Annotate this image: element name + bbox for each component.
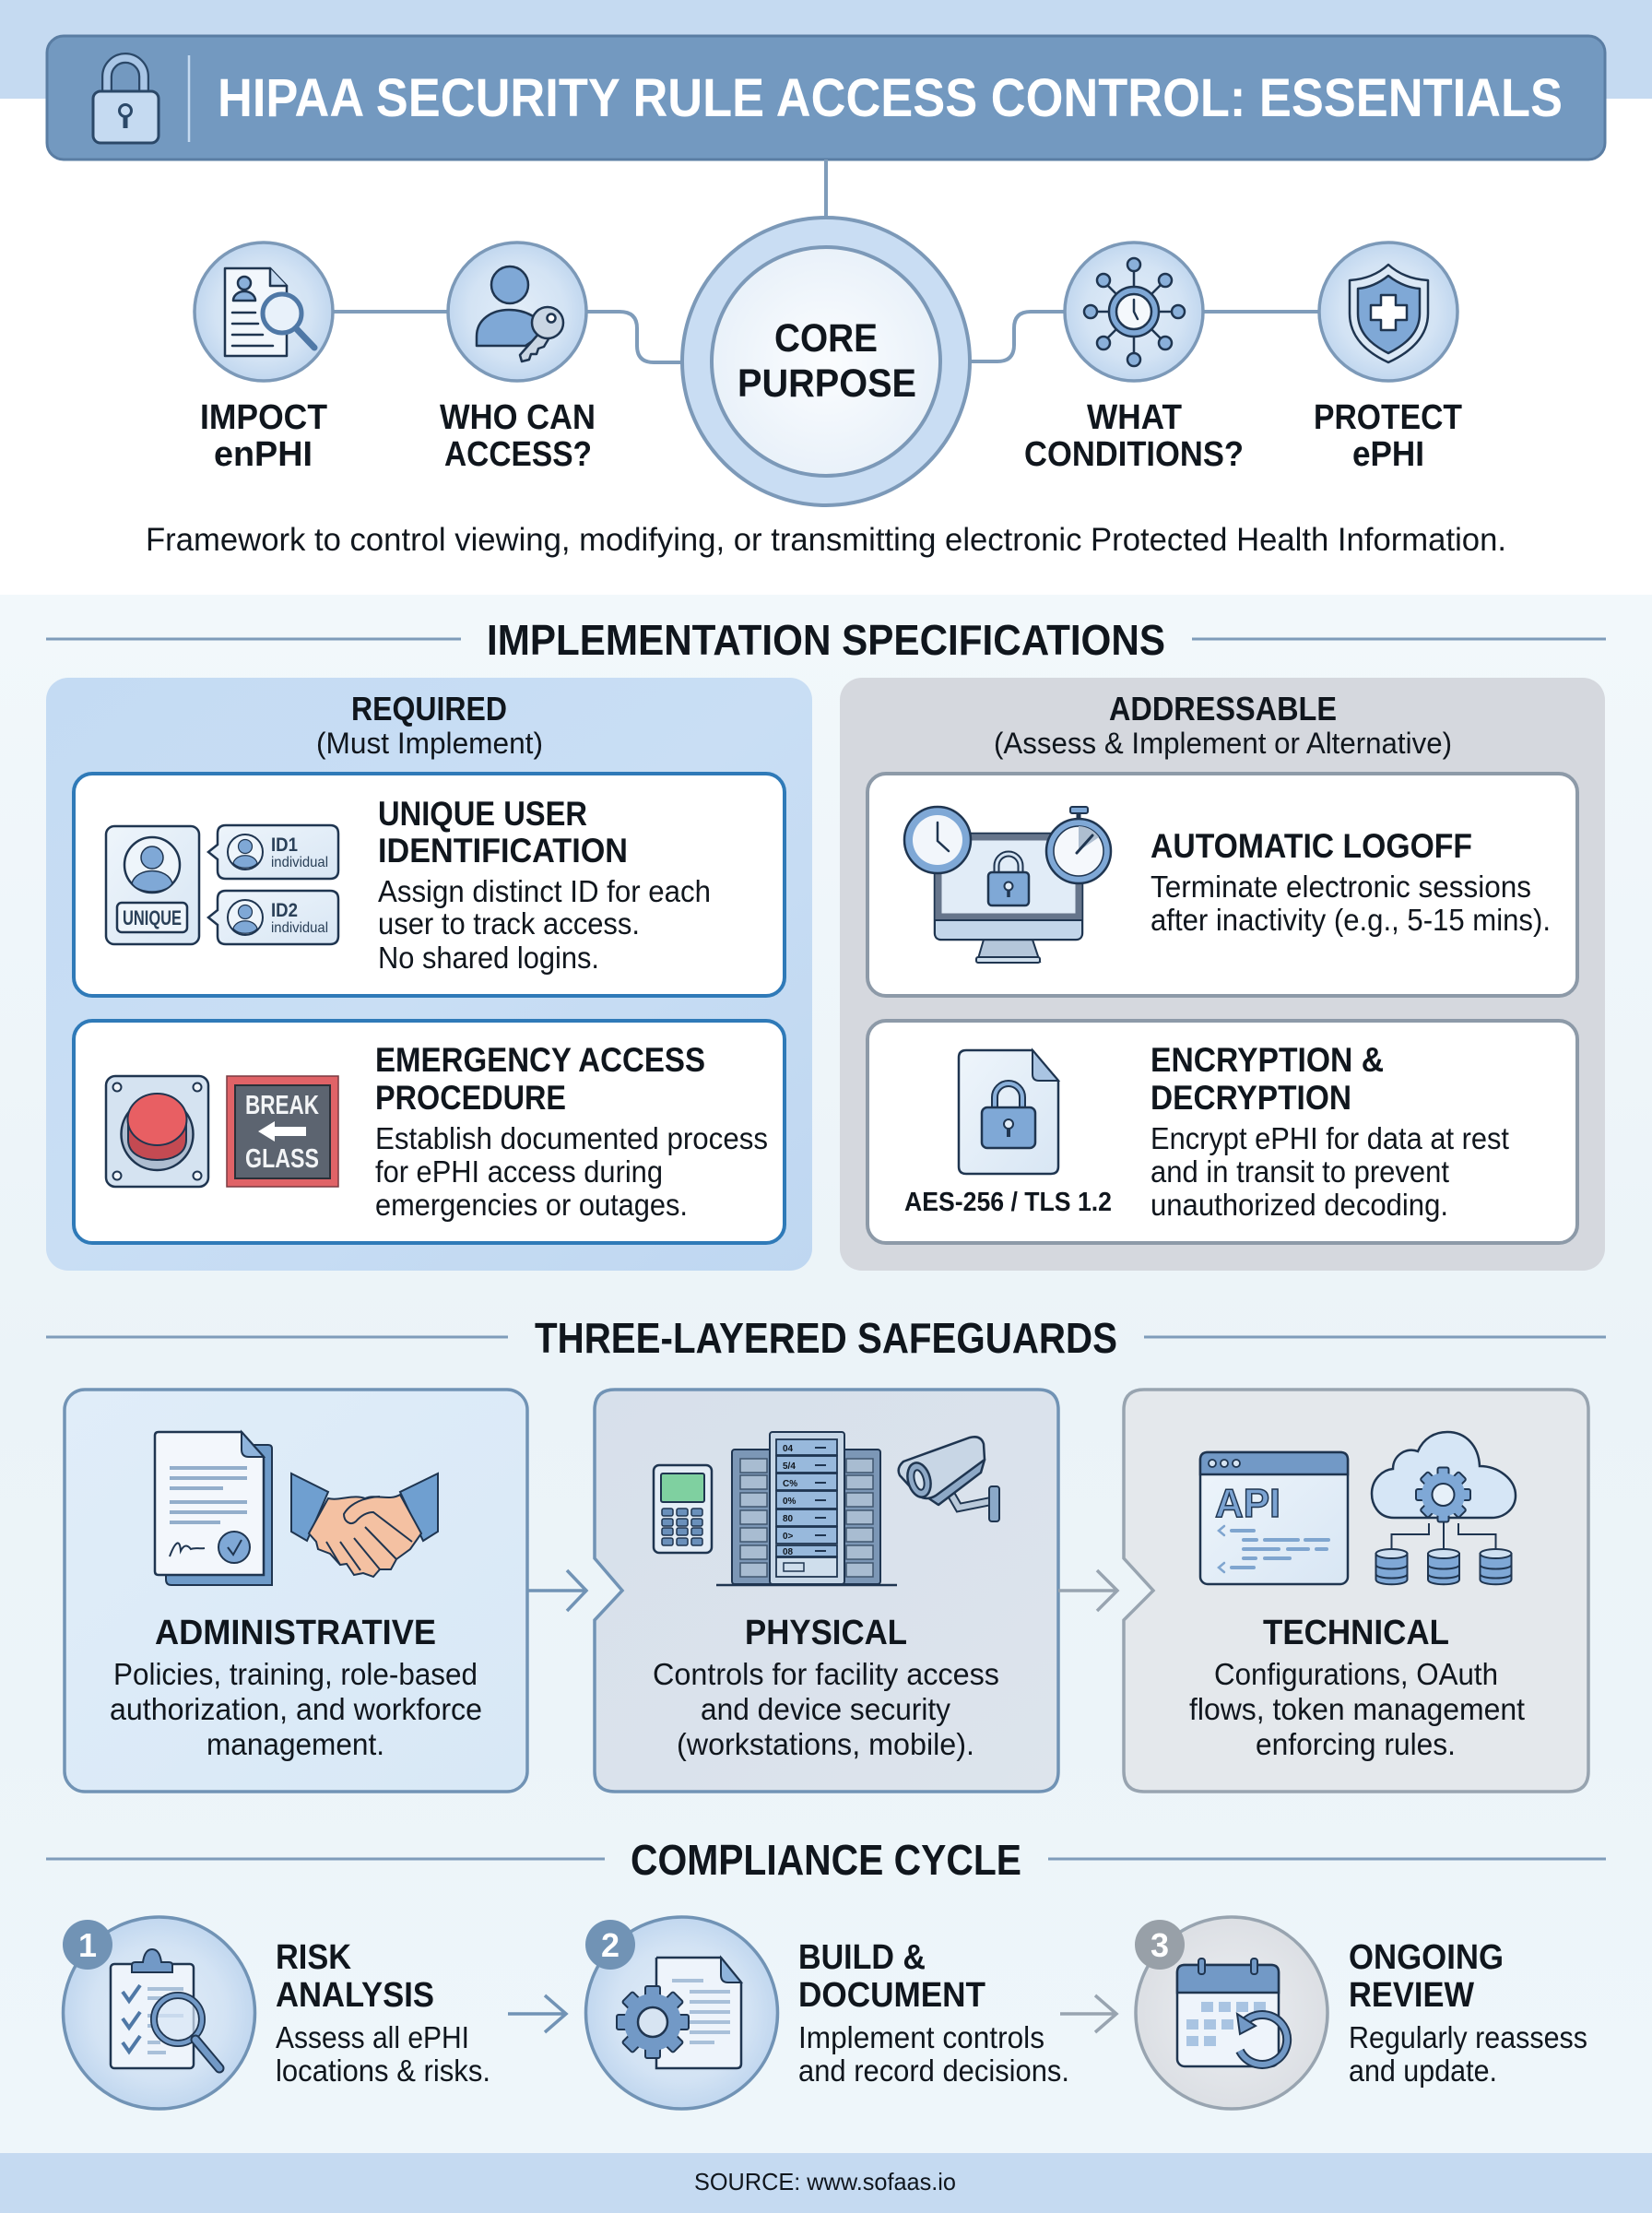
icon: server racks: C% <box>783 1479 797 1489</box>
step 1: risk analysis: Assess all ePHI <box>276 2020 469 2054</box>
impoct enphi item: enPHI <box>214 435 313 474</box>
badge: 3 <box>1135 1920 1185 1970</box>
core purpose circle: CORE <box>774 316 878 361</box>
card: encryption and decryption: AES-256 / TLS 1.2 <box>904 1188 1112 1217</box>
badge: 1: 1 <box>78 1926 97 1964</box>
card: technical: Configurations, OAuth <box>1214 1657 1498 1691</box>
step 3: ongoing review: Regularly reassess <box>1349 2020 1587 2054</box>
what conditions item: CONDITIONS? <box>1024 435 1244 474</box>
icon: red emergency button <box>106 1076 208 1187</box>
card: encryption and decryption <box>867 1021 1577 1243</box>
protect ephi item <box>1314 243 1462 474</box>
card: automatic logoff: AUTOMATIC LOGOFF <box>1150 827 1472 865</box>
who can access item: ACCESS? <box>444 435 592 474</box>
panel: addressable: (Assess & Implement or Alternative) <box>994 727 1452 760</box>
core purpose diagram <box>195 160 1462 505</box>
icon: break glass sign: BREAK <box>245 1091 319 1120</box>
card: encryption and decryption: ENCRYPTION & <box>1150 1041 1384 1079</box>
panel: addressable: ADDRESSABLE <box>1109 690 1337 728</box>
core purpose circle <box>682 218 970 505</box>
icon: server racks <box>716 1432 897 1585</box>
card: administrative: Policies, training, role-based <box>113 1657 478 1691</box>
step 1: risk analysis <box>63 1917 490 2109</box>
card: physical: and device security <box>701 1692 950 1726</box>
step 2: build and document: DOCUMENT <box>798 1976 985 2015</box>
icon: api window <box>1200 1452 1348 1584</box>
icon: handshake <box>291 1473 438 1577</box>
arrow: step 1 to step 2 <box>508 1995 566 2032</box>
card: physical: Controls for facility access <box>653 1657 999 1691</box>
step 3: ongoing review: REVIEW <box>1349 1976 1474 2015</box>
icon: padlock <box>93 58 159 143</box>
card: emergency access procedure: PROCEDURE <box>375 1079 566 1117</box>
title banner <box>47 36 1605 160</box>
icon: server racks: 5/4 <box>783 1462 796 1472</box>
what conditions item: WHAT <box>1087 398 1182 437</box>
card: encryption and decryption: DECRYPTION <box>1150 1079 1351 1117</box>
card: administrative <box>65 1390 527 1792</box>
who can access item <box>440 243 596 474</box>
protect ephi item: PROTECT <box>1314 398 1462 437</box>
panel: addressable <box>840 678 1605 1271</box>
icon: server racks: 0> <box>783 1532 794 1542</box>
badge: 3: 3 <box>1150 1926 1169 1964</box>
step 2: build and document: Implement controls <box>798 2020 1044 2054</box>
heading: three-layered safeguards: THREE-LAYERED SAFEGUARDS <box>535 1314 1117 1362</box>
card: physical: PHYSICAL <box>745 1614 907 1652</box>
step 2: build and document: and record decisions. <box>798 2053 1069 2088</box>
card: technical: TECHNICAL <box>1263 1614 1449 1652</box>
card: technical: flows, token management <box>1189 1692 1525 1726</box>
who can access item: WHO CAN <box>440 398 596 437</box>
card: encryption and decryption: Encrypt ePHI for data at rest <box>1150 1121 1509 1155</box>
heading: compliance cycle: COMPLIANCE CYCLE <box>631 1836 1021 1884</box>
icon: id1 bubble: individual <box>271 855 328 870</box>
heading: implementation specifications: IMPLEMENTATION SPECIFICATIONS <box>487 616 1165 664</box>
badge: 1 <box>63 1920 112 1970</box>
icon: keypad <box>654 1465 712 1553</box>
card: encryption and decryption: and in transit to prevent <box>1150 1154 1449 1189</box>
icon: id2 bubble: individual <box>271 920 328 936</box>
icon: signed policy document <box>155 1432 272 1585</box>
card: automatic logoff: after inactivity (e.g., 5-15 mins). <box>1150 903 1551 937</box>
icon: server racks: 04 <box>783 1444 794 1454</box>
protect ephi item: ePHI <box>1352 435 1424 474</box>
icon: id2 bubble: ID2 <box>271 900 298 921</box>
card: physical <box>595 1390 1058 1792</box>
icon: break glass sign <box>227 1076 338 1187</box>
arrow: administrative to physical <box>527 1570 586 1611</box>
card: unique user identification: UNIQUE USER <box>378 795 587 833</box>
badge: 2: 2 <box>601 1926 620 1964</box>
panel: required: (Must Implement) <box>316 727 543 760</box>
arrow: step 2 to step 3 <box>1060 1995 1116 2032</box>
core purpose circle: PURPOSE <box>738 361 916 406</box>
card: technical: enforcing rules. <box>1256 1727 1456 1761</box>
step 1: risk analysis: RISK <box>276 1938 351 1977</box>
icon: unique id card <box>106 826 199 944</box>
step 2: build and document: BUILD & <box>798 1938 926 1977</box>
icon: server racks: 0% <box>783 1497 796 1507</box>
icon: locked file <box>959 1050 1058 1174</box>
card: encryption and decryption: unauthorized decoding. <box>1150 1188 1448 1222</box>
step 2: build and document <box>585 1917 1069 2109</box>
card: unique user identification: user to track access. <box>378 906 640 941</box>
icon: security camera <box>899 1437 999 1521</box>
step 3: ongoing review: and update. <box>1349 2053 1497 2088</box>
icon: id1 bubble: ID1 <box>271 834 298 856</box>
source footer: SOURCE: www.sofaas.io <box>694 2168 956 2195</box>
step 3: ongoing review: ONGOING <box>1349 1938 1504 1977</box>
card: unique user identification: No shared logins. <box>378 941 599 975</box>
step 1: risk analysis: ANALYSIS <box>276 1976 434 2015</box>
card: automatic logoff <box>867 774 1577 996</box>
icon: server racks: 80 <box>783 1514 794 1524</box>
card: automatic logoff: Terminate electronic sessions <box>1150 870 1531 904</box>
framework description: Framework to control viewing, modifying, or transmitting electronic Protected Health Information. <box>146 522 1506 558</box>
badge: 2 <box>585 1920 635 1970</box>
panel: required <box>46 678 812 1271</box>
icon: monitor with clocks <box>904 807 1111 963</box>
icon: id2 bubble <box>208 891 338 944</box>
what conditions item <box>1024 243 1244 474</box>
card: emergency access procedure: Establish documented process <box>375 1121 768 1155</box>
impoct enphi item: IMPOCT <box>200 398 327 437</box>
icon: gear and document <box>617 1958 741 2068</box>
card: technical <box>1124 1390 1588 1792</box>
icon: calendar with return arrow <box>1177 1959 1287 2066</box>
card: emergency access procedure: emergencies or outages. <box>375 1188 688 1222</box>
icon: id1 bubble <box>208 825 338 879</box>
card: unique user identification <box>74 774 785 996</box>
icon: clipboard and magnifier <box>111 1949 219 2068</box>
card: physical: (workstations, mobile). <box>677 1727 974 1761</box>
card: emergency access procedure <box>74 1021 785 1243</box>
panel: required: REQUIRED <box>351 690 507 728</box>
card: unique user identification: IDENTIFICATION <box>378 832 628 870</box>
card: emergency access procedure: EMERGENCY ACCESS <box>375 1041 705 1079</box>
arrow: physical to technical <box>1058 1570 1117 1611</box>
step 3: ongoing review <box>1135 1917 1587 2109</box>
card: unique user identification: Assign distinct ID for each <box>378 874 711 908</box>
card: administrative: management. <box>206 1727 384 1761</box>
card: emergency access procedure: for ePHI access during <box>375 1154 663 1189</box>
icon: api window: API <box>1215 1481 1280 1526</box>
icon: break glass sign: GLASS <box>245 1144 319 1174</box>
icon: unique id card: UNIQUE <box>123 906 182 929</box>
card: administrative: authorization, and workforce <box>110 1692 482 1726</box>
step 1: risk analysis: locations & risks. <box>276 2053 490 2088</box>
card: administrative: ADMINISTRATIVE <box>155 1614 436 1652</box>
icon: server racks: 08 <box>783 1547 794 1557</box>
icon: cloud with gear and databases <box>1372 1432 1516 1584</box>
impoct enphi item <box>195 243 333 474</box>
